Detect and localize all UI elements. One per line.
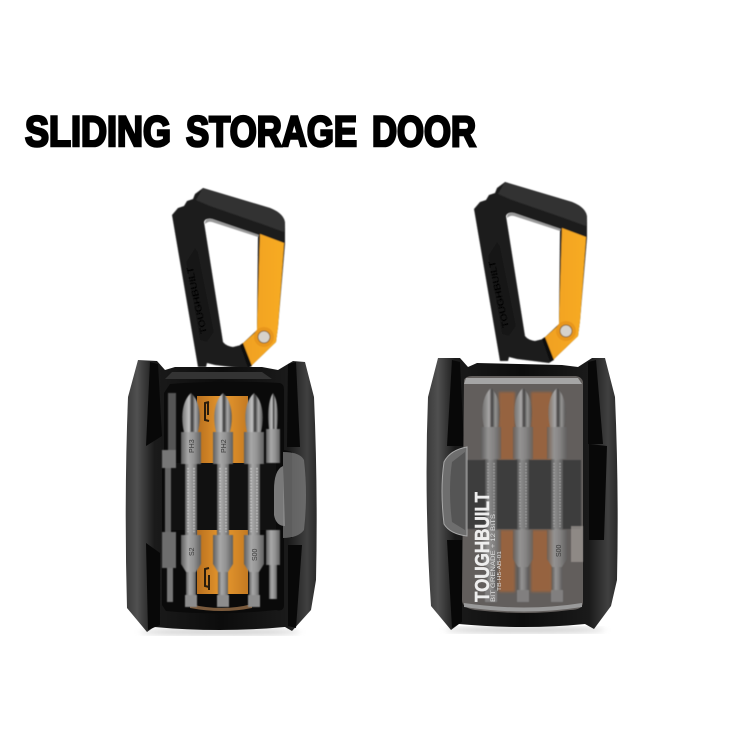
lower orange barrel, left	[197, 530, 248, 594]
bit labels, left: S00	[252, 548, 259, 561]
door grip	[442, 447, 467, 536]
bit labels, left: PH3	[189, 439, 196, 453]
title: SLIDING	[25, 108, 171, 156]
shoulder facets, right	[447, 360, 607, 628]
elastic band, left	[168, 463, 276, 530]
bit 1: PH3	[181, 393, 201, 607]
body top rim, left	[165, 372, 272, 379]
bit 4: narrow	[266, 393, 280, 599]
shoulder facets, left	[146, 362, 302, 630]
bits through door	[481, 388, 583, 602]
inner door tab	[274, 466, 285, 526]
body shadow, right	[445, 627, 605, 633]
model number: TB-H5-AB-01	[497, 551, 503, 591]
body shadow, left	[140, 629, 300, 635]
door handle, translucent	[283, 452, 306, 538]
carabiner clip, left	[172, 188, 285, 369]
grip inner	[450, 452, 465, 530]
band through door	[466, 460, 581, 529]
bit 4, faint	[571, 526, 583, 562]
door panel	[462, 376, 583, 613]
bit 2, closed	[513, 388, 533, 602]
holder body, right	[427, 358, 618, 630]
orange strips through door	[499, 392, 552, 592]
bit 2: PH2	[213, 393, 233, 607]
title: STORAGE	[186, 108, 357, 156]
door bottom highlight	[464, 603, 582, 612]
title	[25, 108, 476, 156]
bit 3: SQ	[244, 393, 264, 607]
product: open door bit holder (left)	[126, 188, 317, 635]
product name: BIT GRENADE + 12 BITS	[490, 513, 497, 602]
side bit, partial	[162, 393, 176, 602]
brand label: TOUGHBUILT	[472, 492, 494, 602]
bit label, closed: S00	[556, 544, 563, 557]
holder body, left	[126, 360, 317, 632]
bit labels, left: PH2	[221, 439, 228, 453]
bit labels, left	[189, 439, 259, 561]
bit labels, left: S2	[189, 547, 196, 556]
title: DOOR	[372, 108, 476, 156]
bit 1, closed	[481, 388, 501, 602]
product: closed door bit holder (right)	[427, 182, 618, 633]
barrel base, left	[190, 604, 252, 611]
door top highlight	[464, 378, 582, 384]
carabiner clip, right	[474, 182, 587, 363]
bit 3, closed	[547, 388, 567, 602]
orange barrel, left	[197, 396, 248, 464]
cavity, left	[162, 382, 292, 613]
orange barrel marks, left	[205, 402, 209, 590]
